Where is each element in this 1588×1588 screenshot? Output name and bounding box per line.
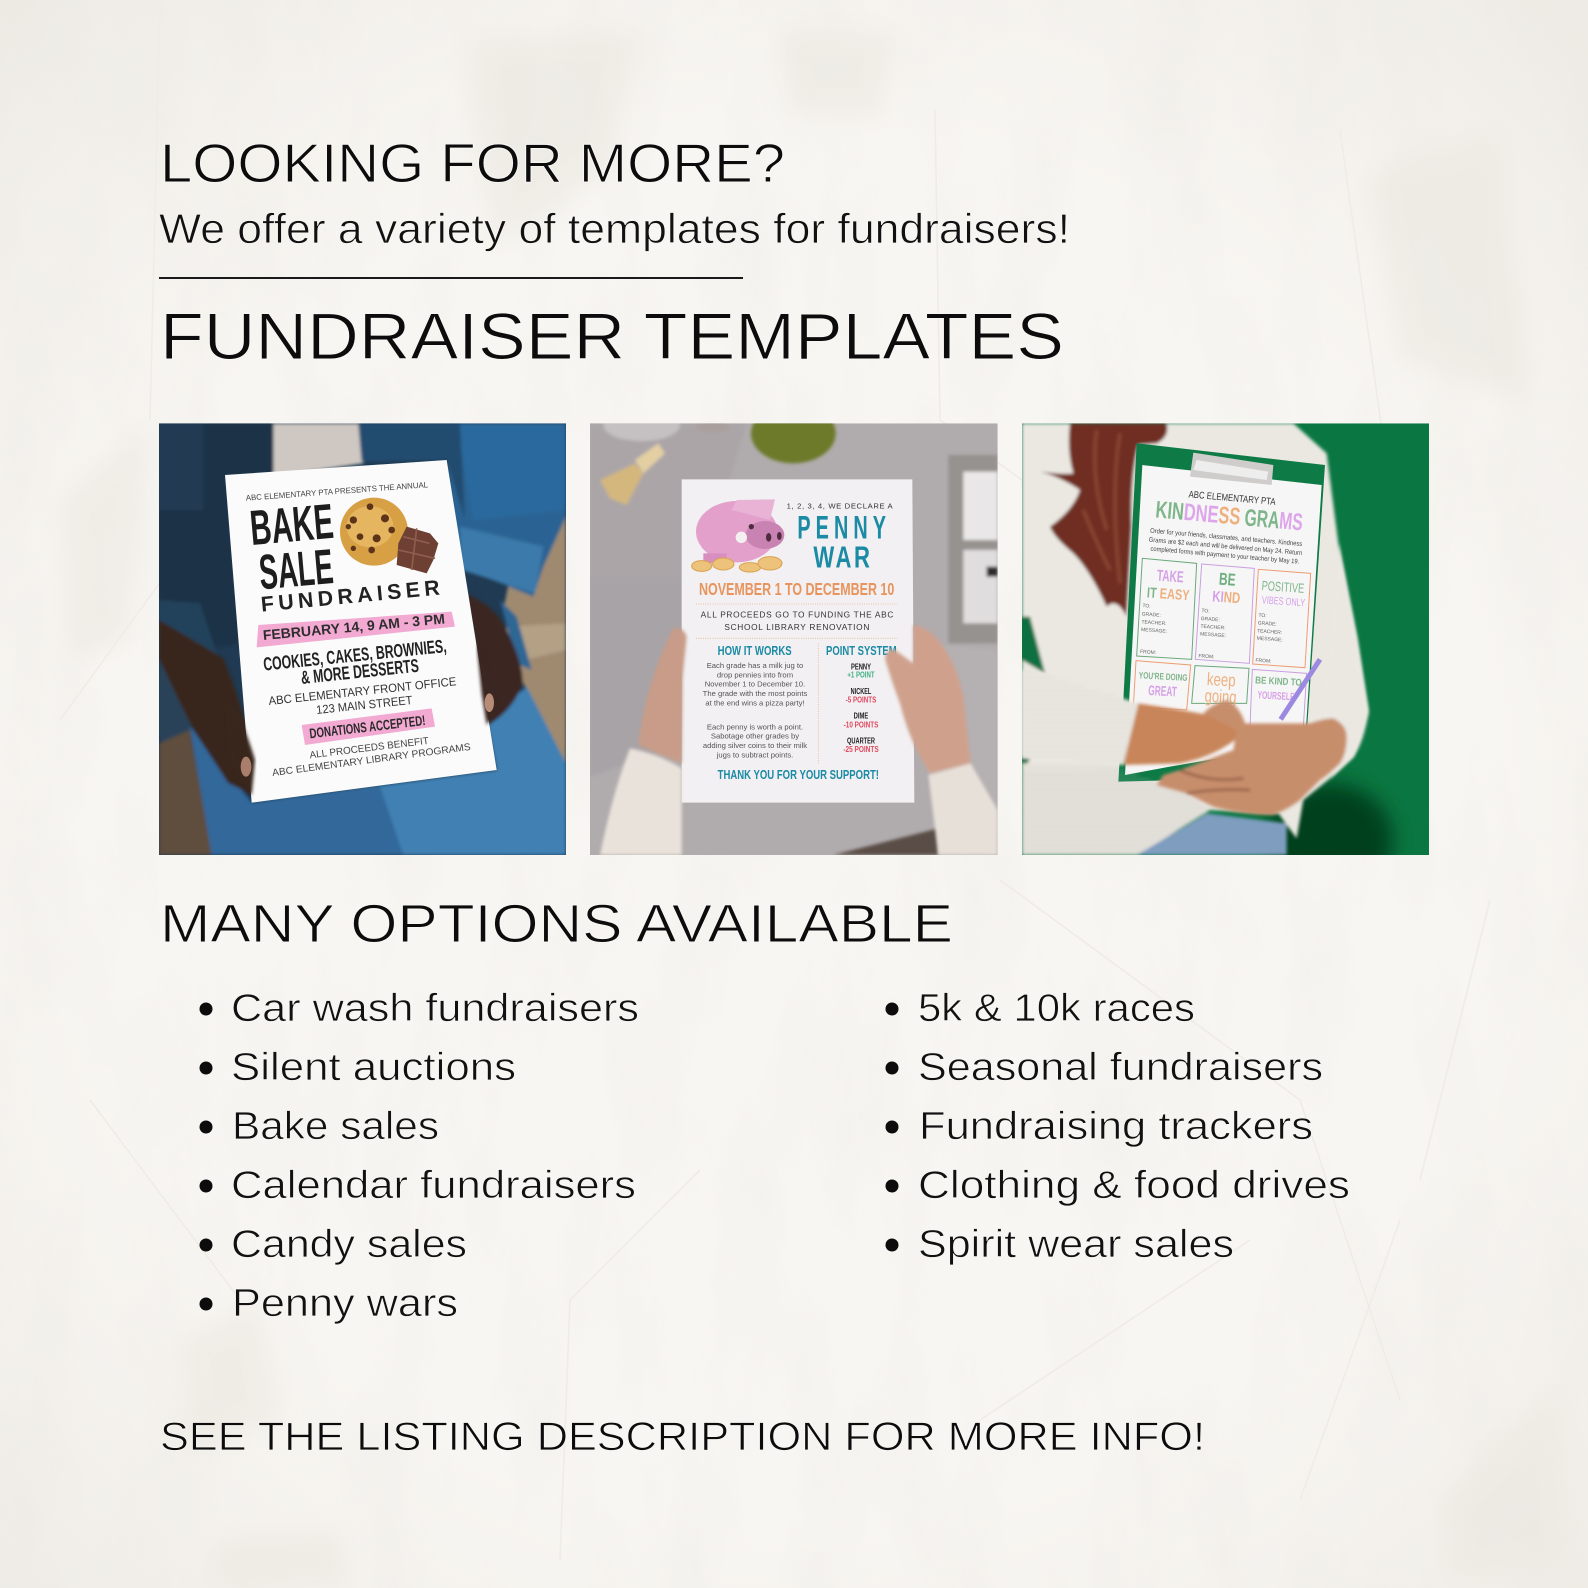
flyer text: ALL PROCEEDS GO TO FUNDING THE ABC — [701, 609, 893, 619]
flyer text and art: ABC ELEMENTARY FRONT OFFICE — [268, 674, 457, 708]
pen — [1281, 659, 1320, 719]
flyer sheet — [682, 479, 914, 803]
list item: spirit wear: Spirit wear sales — [918, 1223, 1234, 1266]
flyer text: at the end wins a pizza party! — [705, 698, 805, 707]
flyer sheet — [225, 460, 497, 803]
kindness gram cards: TO: — [1142, 603, 1151, 610]
kindness gram cards: TEACHER: — [1257, 628, 1282, 636]
kindness gram cards: keep — [1206, 669, 1236, 690]
flyer text: Each penny is worth a point. — [707, 722, 803, 731]
kindness gram cards: TEACHER: — [1141, 619, 1167, 627]
list item: penny wars: Penny wars — [232, 1282, 458, 1325]
kindness gram cards: MESSAGE: — [1141, 627, 1167, 635]
kindness gram cards: TO: — [1258, 613, 1267, 619]
flyer text and art: ABC ELEMENTARY PTA PRESENTS THE ANNUAL — [245, 480, 429, 503]
heading: many options available: MANY OPTIONS AVAILABLE — [160, 894, 953, 954]
list item: bake sales: Bake sales — [232, 1105, 439, 1148]
kindness gram cards: going — [1204, 686, 1237, 707]
list item: drives: Clothing & food drives — [918, 1164, 1350, 1207]
flyer text and art: SALE — [257, 539, 335, 600]
arms, sleeves and hands — [1022, 543, 1368, 855]
photo panel: bake sale flyer held on lap — [159, 423, 566, 855]
flyer text: Grams are $2 each and will be delivered on May 24. Return — [1148, 537, 1303, 557]
kindness gram cards: GRADE: — [1258, 620, 1277, 628]
flyer text and art — [245, 480, 472, 779]
kindness gram cards: TAKE — [1156, 568, 1184, 587]
flyer text: Order for your friends, classmates, and teachers. Kindness — [1150, 528, 1303, 548]
flyer text and art: COOKIES, CAKES, BROWNIES, — [262, 635, 447, 675]
flyer text: KINDNESS — [1154, 496, 1242, 531]
photo panel: penny war flyer held on table — [590, 403, 998, 855]
kindness gram cards — [1133, 558, 1311, 727]
list item: car wash: Car wash fundraisers — [231, 987, 639, 1030]
flyer text: -25 POINTS — [843, 745, 879, 754]
list item: calendar fundraisers: Calendar fundraisers — [231, 1164, 636, 1207]
kindness gram cards: TEACHER: — [1200, 624, 1226, 631]
flyer text: Each grade has a milk jug to — [707, 661, 803, 670]
list item: seasonal: Seasonal fundraisers — [918, 1046, 1323, 1089]
flyer text: POINT SYSTEM — [826, 644, 897, 658]
flyer text: ABC ELEMENTARY PTA — [1188, 489, 1276, 508]
list item: candy sales: Candy sales — [231, 1223, 467, 1266]
kindness gram cards: YOU'RE DOING — [1139, 670, 1188, 683]
heading: looking for more: LOOKING FOR MORE? — [160, 132, 785, 194]
list: right column of fundraiser types — [886, 987, 1350, 1266]
flyer text: drop pennies into from — [717, 670, 793, 679]
hands and sleeves — [600, 625, 998, 855]
kindness gram cards: MESSAGE: — [1257, 636, 1283, 643]
flyer text and art: ABC ELEMENTARY LIBRARY PROGRAMS — [272, 742, 472, 779]
kindness gram cards: KIND — [1212, 588, 1241, 607]
clipboard clip — [1190, 453, 1273, 485]
flyer text: 1, 2, 3, 4, WE DECLARE A — [787, 501, 894, 510]
flyer text and art: FUNDRAISER — [260, 576, 441, 617]
flyer text — [1148, 489, 1304, 566]
flyer text: NICKEL — [851, 687, 871, 696]
kindness gram cards: GRADE: — [1201, 616, 1220, 623]
flyer text and art: BAKE — [248, 494, 336, 556]
flyer text: -10 POINTS — [844, 720, 879, 729]
clipboard — [1118, 443, 1325, 782]
list item: trackers: Fundraising trackers — [919, 1105, 1313, 1148]
footer call to action: SEE THE LISTING DESCRIPTION FOR MORE INFO! — [160, 1415, 1205, 1459]
kindness gram cards: POSITIVE — [1261, 578, 1305, 596]
flyer text — [696, 501, 897, 782]
kindness gram cards: MESSAGE: — [1200, 631, 1226, 639]
kindness gram cards: IT EASY — [1146, 585, 1190, 604]
kindness gram cards: YOURSELF — [1257, 689, 1295, 703]
flyer text: QUARTER — [847, 737, 875, 746]
flyer text and art: 123 MAIN STREET — [316, 693, 414, 717]
flyer text: NOVEMBER 1 TO DECEMBER 10 — [699, 579, 894, 599]
flyer art: piggy bank — [692, 499, 784, 572]
flyer text: jugs to subtract points. — [716, 750, 793, 759]
list: left column of fundraiser types — [200, 987, 639, 1325]
flyer text: November 1 to December 10. — [705, 680, 805, 689]
kindness gram cards: FROM: — [1255, 658, 1272, 665]
flyer text: adding silver coins to their milk — [703, 741, 807, 750]
list item: races: 5k & 10k races — [918, 987, 1195, 1030]
subheading: variety of templates: We offer a variety of templates for fundraisers! — [159, 205, 1070, 252]
kindness gram cards: BE — [1218, 569, 1236, 590]
flyer sheet — [1125, 465, 1322, 775]
flyer text and art: DONATIONS ACCEPTED! — [309, 712, 426, 741]
flyer text: HOW IT WORKS — [718, 644, 792, 658]
kindness gram cards: VIBES ONLY — [1261, 594, 1306, 609]
kindness gram cards: GRADE: — [1142, 611, 1161, 619]
flyer text: DIME — [854, 712, 869, 721]
kindness gram cards: TO: — [1201, 608, 1210, 615]
flyer text: The grade with the most points — [703, 689, 808, 698]
kindness gram cards: GREAT — [1148, 682, 1178, 700]
flyer text: +1 POINT — [847, 670, 875, 679]
flyer text: SCHOOL LIBRARY RENOVATION — [724, 622, 869, 632]
flyer text: THANK YOU FOR YOUR SUPPORT! — [718, 768, 879, 782]
kindness gram cards: BE KIND TO — [1255, 675, 1302, 689]
kindness gram cards: FROM: — [1140, 649, 1156, 656]
flyer text: Sabotage other grades by — [711, 732, 799, 741]
photo panel: kindness grams flyer on clipboard — [1022, 423, 1429, 897]
kindness gram cards: FROM: — [1198, 653, 1215, 660]
flyer text and art: FEBRUARY 14, 9 AM - 3 PM — [262, 610, 446, 643]
flyer text: completed forms with payment to your teacher by May 19. — [1150, 546, 1300, 566]
flyer text and art: ALL PROCEEDS BENEFIT — [309, 736, 429, 761]
flyer text: GRAMS — [1243, 504, 1304, 536]
flyer text: WAR — [813, 540, 870, 574]
flyer text: -5 POINTS — [846, 695, 877, 704]
flyer text: PENNY — [797, 509, 886, 546]
list item: silent auctions: Silent auctions — [231, 1046, 516, 1089]
flyer text and art: & MORE DESSERTS — [300, 655, 420, 688]
flyer text: PENNY — [851, 662, 871, 671]
heading: fundraiser templates: FUNDRAISER TEMPLATES — [160, 299, 1064, 373]
divider rule — [159, 277, 743, 279]
